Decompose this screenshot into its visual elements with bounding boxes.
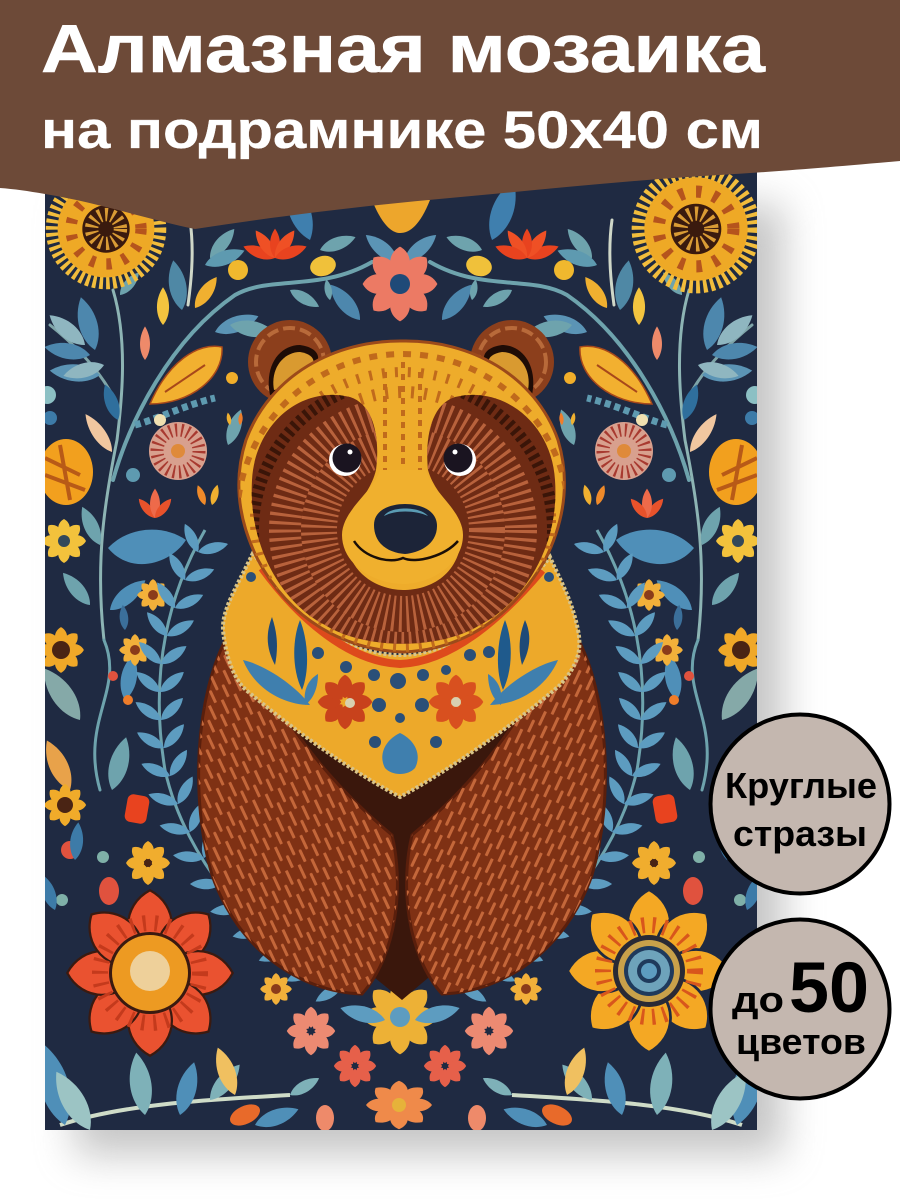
bottom central floral motif [260, 973, 542, 1129]
side foliage, left [29, 177, 372, 1136]
pink round flower [149, 422, 207, 480]
small orange sprig [222, 407, 247, 447]
sunflower top left [52, 175, 160, 283]
small orange buds [194, 484, 221, 506]
muzzle [342, 470, 463, 584]
forehead dashes [239, 351, 564, 652]
red sprig and dots [36, 386, 166, 912]
badge: up to 50 colours: до [732, 979, 784, 1020]
orange flower bottom right [568, 890, 730, 1052]
background shadow [75, 205, 783, 1155]
head [237, 341, 569, 686]
bear right leg [407, 635, 605, 994]
badge: round rhinestones [710, 714, 890, 894]
yellow side flowers [38, 519, 170, 885]
laurel garland [132, 519, 354, 1012]
badge: up to 50 colours: цветов [736, 1021, 866, 1062]
badge: up to 50 colours: 50 [789, 949, 869, 1028]
badge: round rhinestones: Круглые [725, 765, 877, 806]
right ear [470, 320, 554, 404]
central top floral motif [361, 200, 441, 321]
red flower bottom left [67, 890, 233, 1056]
bottom corner foliage [29, 1040, 334, 1136]
bear back body [296, 724, 512, 1000]
sunflower top right [639, 172, 753, 286]
head fur [252, 395, 555, 644]
painting canvas [29, 172, 773, 1136]
blue fern upper left [43, 177, 366, 422]
mouth [354, 541, 458, 560]
nose [374, 504, 437, 554]
red flower top [241, 227, 309, 263]
title banner [0, 0, 900, 229]
bib leaves left [243, 617, 558, 774]
stems and branches [50, 220, 372, 790]
title line 2: на подрамнике 50х40 см [41, 101, 763, 160]
bib collar [223, 553, 579, 797]
eyes [329, 444, 476, 476]
pale leaf [80, 410, 117, 456]
yellow leaf and buds [140, 253, 338, 404]
small red flower [136, 489, 174, 521]
bib flowers [318, 675, 372, 729]
title line 1: Алмазная мозаика [41, 11, 766, 87]
bear left leg [199, 635, 397, 994]
bear [199, 320, 605, 1000]
left ear [248, 320, 332, 404]
bib dots [246, 572, 554, 748]
mirrored foliage, right [430, 177, 773, 1136]
orange striped leaf [39, 439, 93, 505]
dotted sprig [135, 398, 215, 425]
blue teardrop leaves [35, 504, 186, 794]
fur strokes [252, 394, 556, 644]
badge: round rhinestones: стразы [733, 813, 867, 854]
badge: up to 50 colours [710, 920, 890, 1098]
